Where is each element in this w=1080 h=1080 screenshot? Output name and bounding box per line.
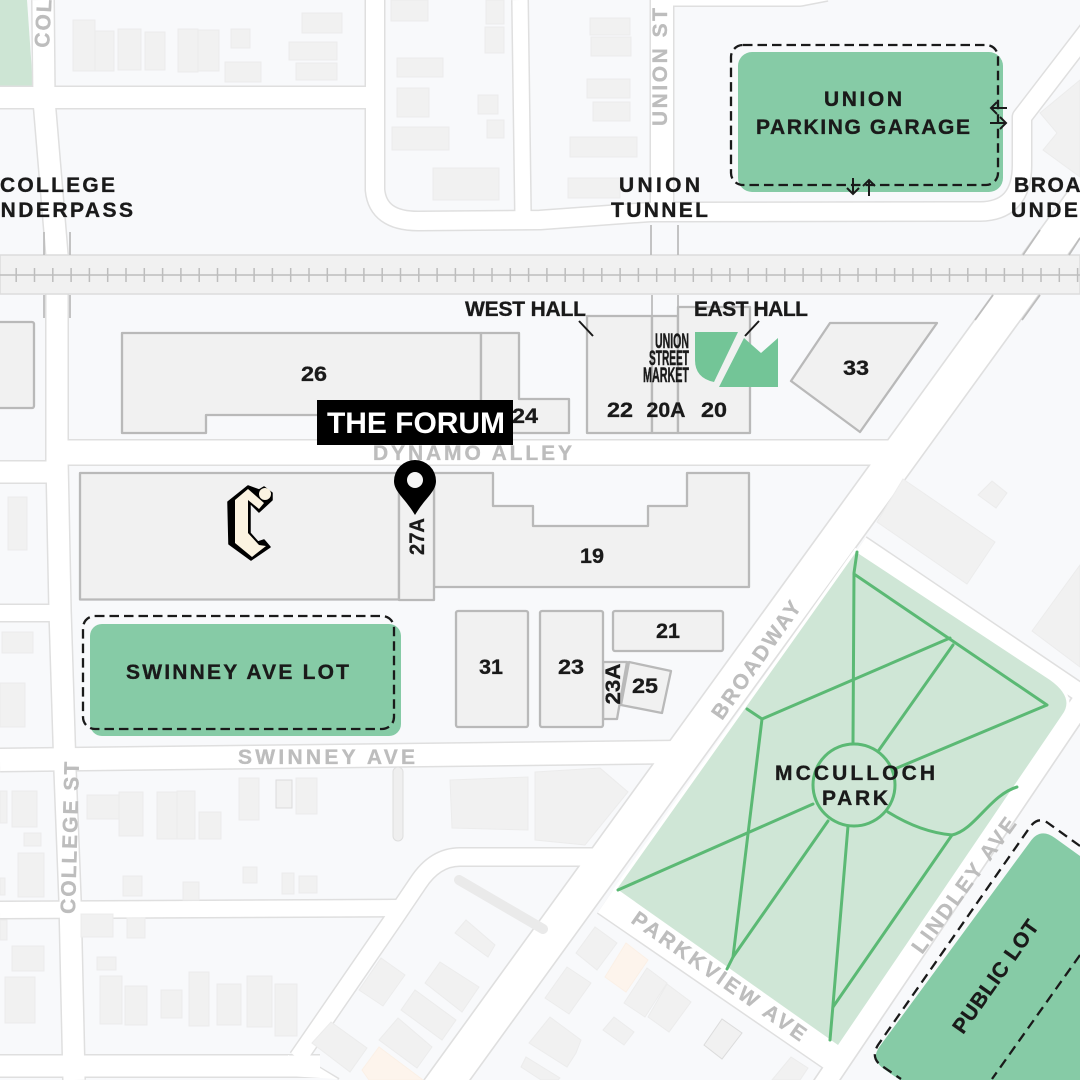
building numbers: 20A xyxy=(646,399,686,422)
building numbers: 31 xyxy=(479,656,503,679)
McCulloch Park label: MCCULLOCH xyxy=(775,762,935,785)
building numbers: 27A xyxy=(406,518,429,555)
Public Lot xyxy=(875,820,1080,1080)
The Forum building xyxy=(80,473,399,600)
building 33 xyxy=(791,323,937,432)
building numbers: 25 xyxy=(632,675,658,698)
building numbers: 33 xyxy=(843,357,869,380)
McCulloch Park label: PARK xyxy=(822,787,888,810)
Public Lot: PUBLIC LOT xyxy=(948,916,1044,1038)
street names: SWINNEY AVE xyxy=(238,746,415,769)
icon: location pin xyxy=(394,460,436,515)
Union Street Market logo: MARKET xyxy=(643,364,689,387)
building numbers: 23 xyxy=(558,656,584,679)
Union Street Market logo: STREET xyxy=(649,347,689,370)
building numbers: 19 xyxy=(580,545,604,568)
Union Parking Garage: UNION xyxy=(824,88,902,111)
East Hall label: EAST HALL xyxy=(694,298,808,321)
McCulloch Park label xyxy=(775,762,935,810)
underpass and tunnel labels: COLLEGE xyxy=(0,174,115,197)
buildings 22, 20A, 20 xyxy=(587,307,750,433)
underpass and tunnel labels xyxy=(0,174,1080,222)
street names: DYNAMO ALLEY xyxy=(373,442,572,465)
McCulloch Park xyxy=(617,552,1066,1045)
Swinney Ave Lot: SWINNEY AVE LOT xyxy=(126,661,349,684)
building numbers: 24 xyxy=(512,405,538,428)
building 24 xyxy=(481,333,569,433)
building numbers: 21 xyxy=(656,620,680,643)
The Forum label: THE FORUM xyxy=(327,407,505,440)
building numbers: 22 xyxy=(607,399,633,422)
railway xyxy=(0,255,1080,294)
underpass and tunnel labels: TUNNEL xyxy=(611,199,708,222)
building 19 xyxy=(434,473,749,587)
green space top left xyxy=(0,0,33,87)
Union Parking Garage xyxy=(731,45,1003,192)
building 26 xyxy=(122,333,481,433)
East Hall label xyxy=(694,298,808,336)
underpass and tunnel labels: UNION xyxy=(619,174,700,197)
building numbers xyxy=(301,357,869,704)
Union Street Market logo xyxy=(643,330,778,387)
street names: LINDLEY AVE xyxy=(907,813,1021,958)
Union Parking Garage: PARKING GARAGE xyxy=(756,116,970,139)
West Hall label: WEST HALL xyxy=(465,298,586,321)
street names: BROADWAY xyxy=(707,597,806,724)
icon: garage entrance arrows xyxy=(847,102,1007,196)
The Forum label xyxy=(317,400,513,445)
icon: blackletter C logo xyxy=(228,486,272,560)
building numbers: 23A xyxy=(602,664,625,704)
street names: PARKKVIEW AVE xyxy=(627,907,810,1046)
underpass markers xyxy=(44,225,1080,320)
Swinney Ave Lot xyxy=(83,616,401,736)
street names: COLLEGE ST xyxy=(57,761,84,914)
alley in south block xyxy=(459,880,543,929)
street names: UNION ST xyxy=(649,8,672,126)
building 27A xyxy=(399,473,434,600)
Union Street Market logo: UNION xyxy=(655,330,689,353)
buildings 31, 23, 21, 23A, 25 xyxy=(456,611,723,727)
building at left edge xyxy=(0,322,34,408)
West Hall label xyxy=(465,298,593,336)
building numbers: 26 xyxy=(301,363,327,386)
building numbers: 20 xyxy=(701,399,727,422)
